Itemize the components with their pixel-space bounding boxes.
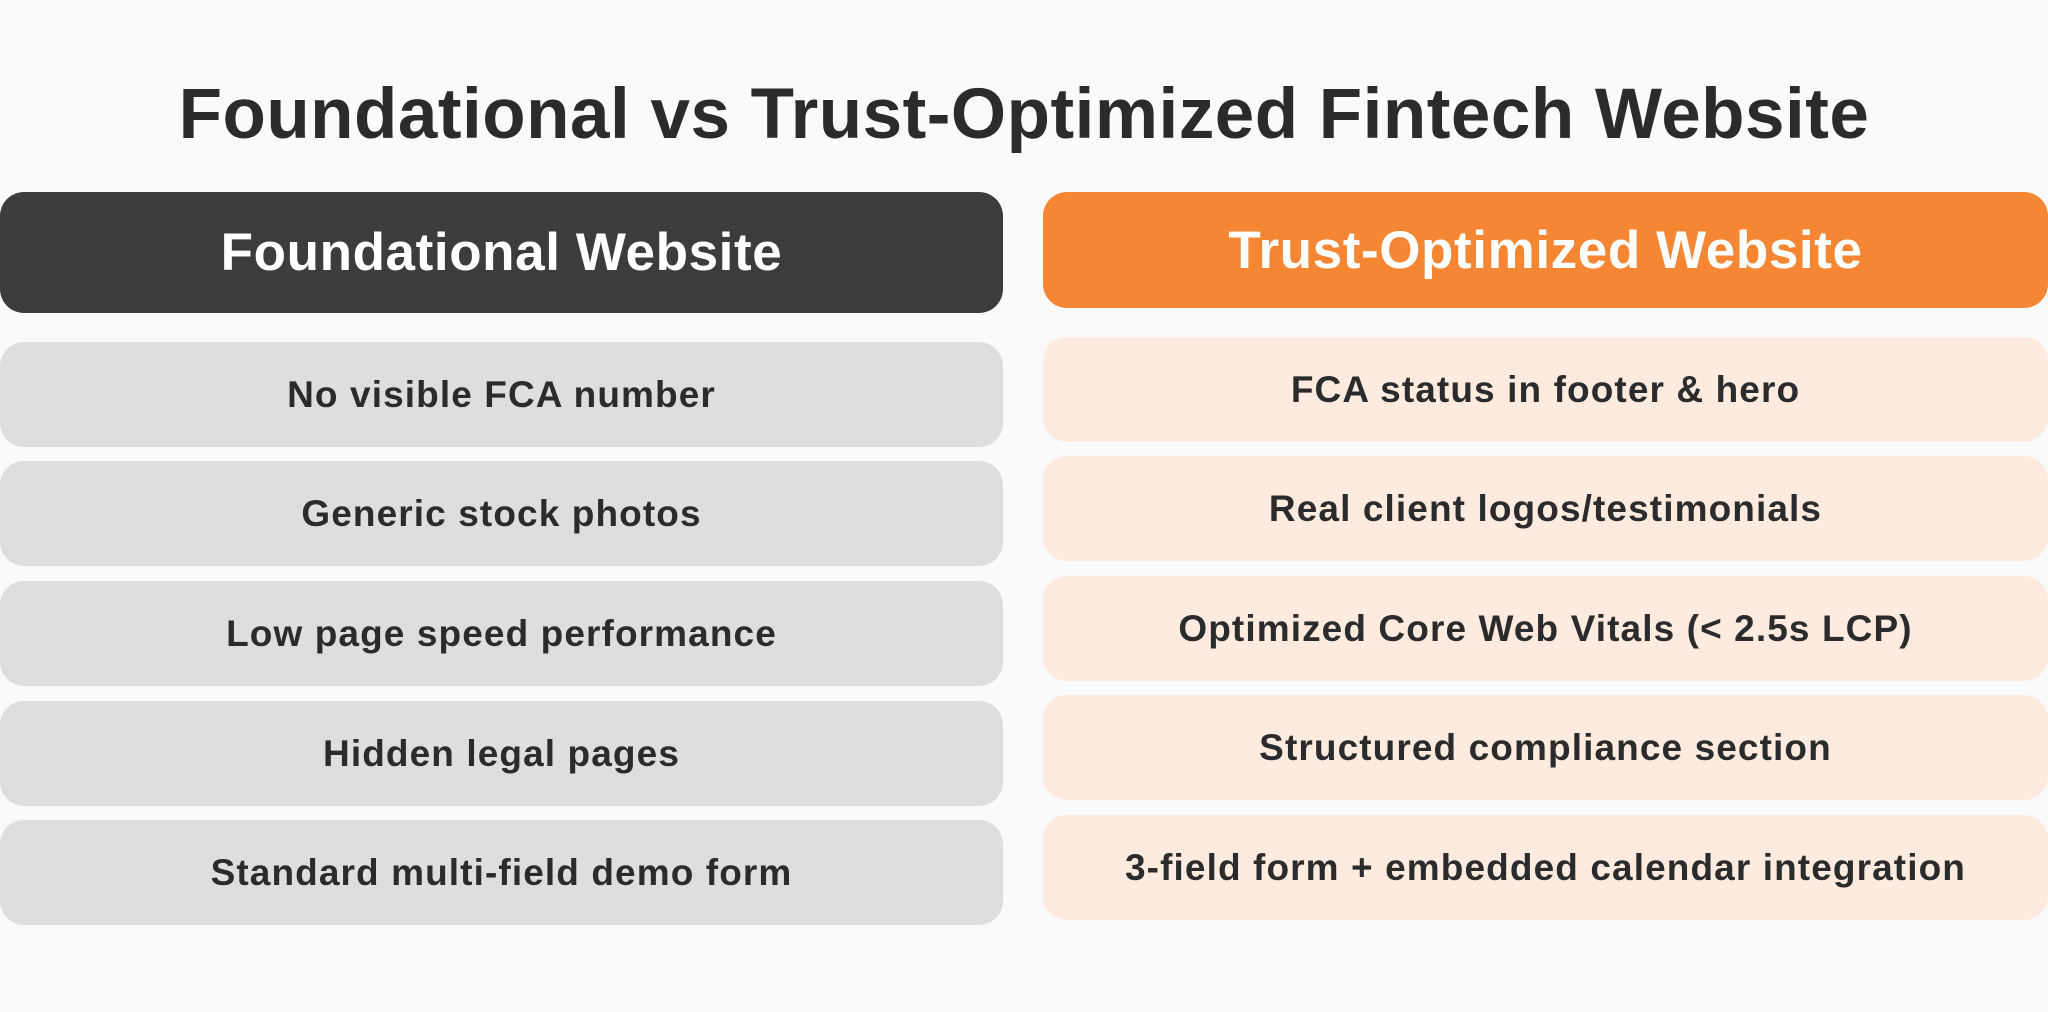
row: right 5: 3-field form + embedded calendar integration bbox=[1125, 846, 1966, 888]
row: right 1 bbox=[1043, 337, 2048, 442]
row: right 5 bbox=[1043, 815, 2048, 920]
row: right 2: Real client logos/testimonials bbox=[1269, 488, 1822, 528]
row: right 2 bbox=[1043, 456, 2048, 561]
row: left 3 bbox=[0, 581, 1003, 686]
panel: trust-optimized header: Trust-Optimized Website bbox=[1228, 220, 1863, 280]
panel: foundational header: Foundational Website bbox=[221, 223, 782, 282]
row: left 4: Hidden legal pages bbox=[323, 732, 680, 774]
row: left 2: Generic stock photos bbox=[301, 492, 702, 534]
panel: trust-optimized header bbox=[1043, 192, 2048, 308]
row: left 2 bbox=[0, 461, 1003, 566]
row: left 5: Standard multi-field demo form bbox=[211, 852, 792, 892]
row: right 4: Structured compliance section bbox=[1259, 726, 1832, 768]
row: left 4 bbox=[0, 701, 1003, 806]
title: Foundational vs Trust-Optimized Fintech Website bbox=[179, 75, 1869, 154]
row: left 5 bbox=[0, 820, 1003, 925]
row: right 4 bbox=[1043, 695, 2048, 800]
row: left 1 bbox=[0, 342, 1003, 447]
row: left 3: Low page speed performance bbox=[226, 612, 777, 654]
row: right 3 bbox=[1043, 576, 2048, 681]
row: right 1: FCA status in footer & hero bbox=[1291, 368, 1800, 410]
row: left 1: No visible FCA number bbox=[287, 374, 716, 414]
row: right 3: Optimized Core Web Vitals (< 2.5s LCP) bbox=[1178, 608, 1913, 648]
panel: foundational header bbox=[0, 192, 1003, 313]
